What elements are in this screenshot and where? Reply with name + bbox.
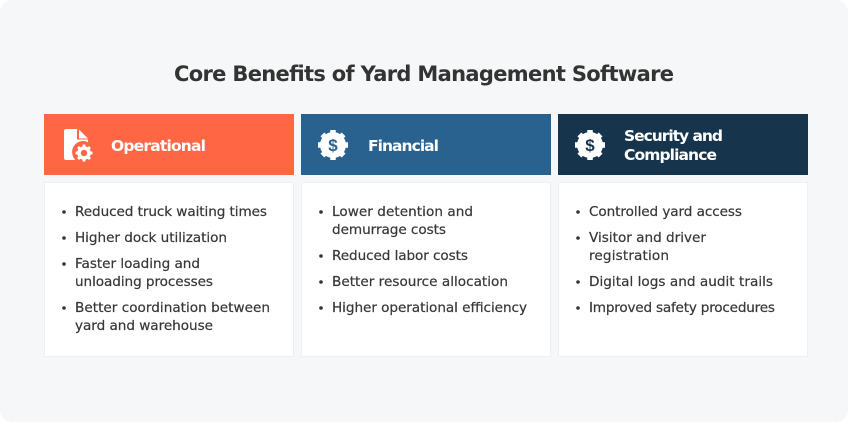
heading: security and compliance: Security and	[624, 127, 723, 145]
icon: document with gear	[64, 129, 92, 162]
operational list: yard and warehouse	[75, 318, 213, 334]
title: Core Benefits of Yard Management Software	[174, 62, 674, 86]
operational list: Better coordination between	[75, 300, 270, 316]
heading: financial: Financial	[368, 137, 439, 155]
security list: Digital logs and audit trails	[589, 274, 773, 290]
operational list: Reduced truck waiting times	[75, 204, 267, 220]
financial list: Higher operational efficiency	[332, 300, 527, 316]
financial header	[301, 114, 551, 175]
security list	[558, 182, 808, 356]
operational list: Higher dock utilization	[75, 230, 227, 246]
heading: security and compliance: Compliance	[624, 146, 717, 164]
financial list: demurrage costs	[332, 222, 446, 238]
security list: Visitor and driver	[589, 230, 706, 246]
operational header	[44, 114, 294, 175]
operational list: Faster loading and	[75, 256, 200, 272]
security list: Improved safety procedures	[589, 300, 775, 316]
icon: dollar gear: $	[585, 136, 595, 155]
panel: financial	[301, 114, 551, 356]
financial list: Better resource allocation	[332, 274, 508, 290]
icon: dollar gear: $	[328, 136, 338, 155]
security list: Controlled yard access	[589, 204, 742, 220]
financial list	[302, 182, 550, 356]
operational list	[44, 182, 294, 356]
heading: operational: Operational	[111, 137, 206, 155]
security header	[558, 114, 808, 175]
icon: dollar gear	[575, 130, 605, 160]
operational list: unloading processes	[75, 274, 213, 290]
financial list: Reduced labor costs	[332, 248, 468, 264]
panel: operational	[44, 114, 294, 356]
icon: dollar gear	[318, 130, 348, 160]
financial list: Lower detention and	[332, 204, 473, 220]
panel: security and compliance	[558, 114, 808, 356]
security list: registration	[589, 248, 669, 264]
heading: security and compliance	[624, 127, 723, 164]
